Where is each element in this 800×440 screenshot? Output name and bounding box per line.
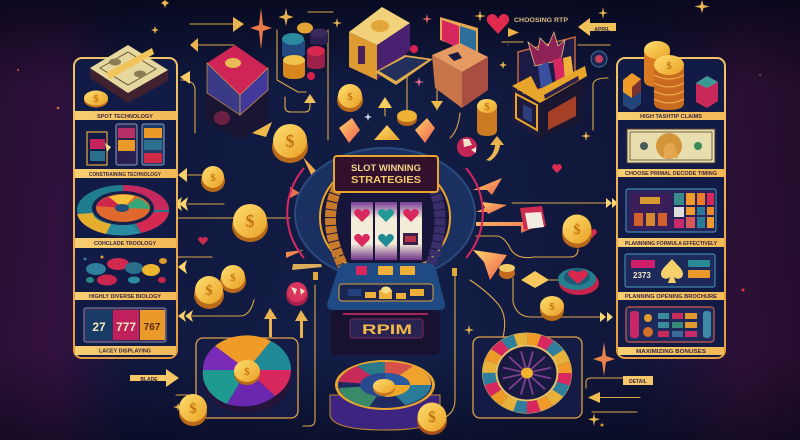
center directional arrows	[286, 118, 549, 288]
icon: stacked blocks	[623, 73, 718, 110]
option cards	[87, 124, 164, 165]
pie frame	[196, 338, 298, 418]
coins: $	[210, 172, 216, 184]
coin: $	[428, 409, 436, 426]
coins: $	[573, 222, 581, 238]
icon: cash stack	[90, 45, 168, 103]
strategy wheel	[77, 185, 169, 235]
icon: coin stacks	[644, 41, 684, 110]
icon: heart	[487, 14, 509, 34]
label bar 4: HIGHLY DIVERSE BIOLOGY	[89, 294, 161, 300]
slot result cells: 777	[116, 320, 136, 334]
coins: $	[205, 283, 213, 299]
label bar 2	[75, 169, 176, 178]
label bar 4: PLANNING OPENING BROCHURE	[625, 294, 717, 300]
side reel strips	[330, 180, 440, 266]
icon: heart dial	[558, 268, 599, 295]
icon: coin stack	[477, 99, 497, 136]
machine base: RPIM	[362, 321, 412, 337]
bonus board	[626, 307, 714, 342]
label bar 1	[618, 112, 724, 120]
label: April: APRIL	[594, 27, 611, 33]
wheel face	[482, 332, 572, 414]
label: detail	[623, 376, 653, 385]
label bar 1	[75, 111, 176, 120]
coins	[194, 84, 592, 321]
label bar 5	[618, 347, 724, 355]
label bar 3	[618, 238, 724, 247]
console	[327, 263, 445, 310]
panel frame	[617, 58, 725, 358]
label: blade: BLADE	[140, 377, 158, 383]
label bar 2: CHOOSE PRIMAL DECODE TIMING	[625, 171, 717, 177]
icon: gold box with tray	[349, 7, 433, 85]
icon: coin stack: $	[484, 101, 490, 113]
marquee title: STRATEGIES	[351, 175, 421, 186]
slot result cells: 767	[144, 322, 161, 333]
posts	[313, 268, 457, 280]
icon: right arcade chest	[512, 32, 587, 138]
label: detail: DETAIL	[629, 379, 647, 385]
label bar 5: MAXIMIZING BONUSES	[636, 349, 706, 355]
pie chart	[179, 335, 298, 426]
dollar bill	[627, 129, 715, 163]
pie center coin: $	[244, 366, 250, 378]
spade card	[625, 254, 715, 287]
spade card: 2373	[633, 271, 651, 280]
panel: left strategies	[74, 45, 177, 358]
label bar 3	[75, 238, 176, 248]
reels window	[348, 198, 425, 262]
game screen	[626, 189, 716, 232]
pie slices	[203, 335, 291, 413]
label bar 1: HIGH TASHTIP CLAIMS	[640, 114, 702, 120]
marquee title	[334, 156, 438, 192]
marquee title: SLOT WINNING	[351, 163, 421, 174]
icon: coin: $	[93, 93, 99, 105]
heading: choosing RTP: CHOOSING RTP	[514, 17, 569, 24]
slot result cells	[84, 308, 166, 342]
label bar 2: CONSTRAINING TECHNOLOGY	[89, 172, 161, 178]
coin: $	[189, 401, 197, 417]
label bar 1: SPOT TECHNOLOGY	[97, 114, 153, 120]
machine base	[330, 310, 440, 355]
coins: $	[286, 131, 294, 151]
panel frame	[74, 58, 177, 358]
coins: $	[246, 211, 254, 231]
icon: tan box with screen	[432, 17, 488, 108]
label bar 5	[75, 346, 176, 355]
icon: dial badge	[591, 51, 607, 67]
icon: playing cards	[520, 206, 546, 230]
slot result cells: 27	[92, 320, 106, 334]
label bar 2	[618, 169, 724, 177]
label bar 4	[618, 292, 724, 300]
roulette wheel	[473, 332, 582, 418]
coin	[417, 402, 447, 435]
panel: right strategies	[617, 41, 725, 358]
central slot machine	[287, 148, 483, 435]
label bar 3: COHCLADE TROOLOGY	[94, 241, 156, 247]
spin wheel	[330, 360, 440, 430]
chips and hearts	[198, 137, 597, 306]
chips	[84, 256, 167, 286]
label bar 5: LACEY DISPLAYING	[99, 349, 151, 355]
icon: red box	[207, 45, 268, 139]
label bar 3: PLANNNING FORMULA EFFECTIVELY	[625, 241, 717, 247]
machine arch	[287, 148, 483, 280]
icon: coin stacks: $	[666, 60, 672, 72]
connector lines	[176, 12, 640, 426]
coins: $	[549, 301, 555, 313]
icon: chip stack	[282, 22, 328, 80]
coins: $	[230, 272, 236, 284]
icon: coin	[84, 90, 108, 108]
wheel frame	[473, 337, 582, 418]
label bar 4	[75, 292, 176, 300]
arrows	[130, 17, 618, 403]
coins: $	[347, 91, 353, 103]
